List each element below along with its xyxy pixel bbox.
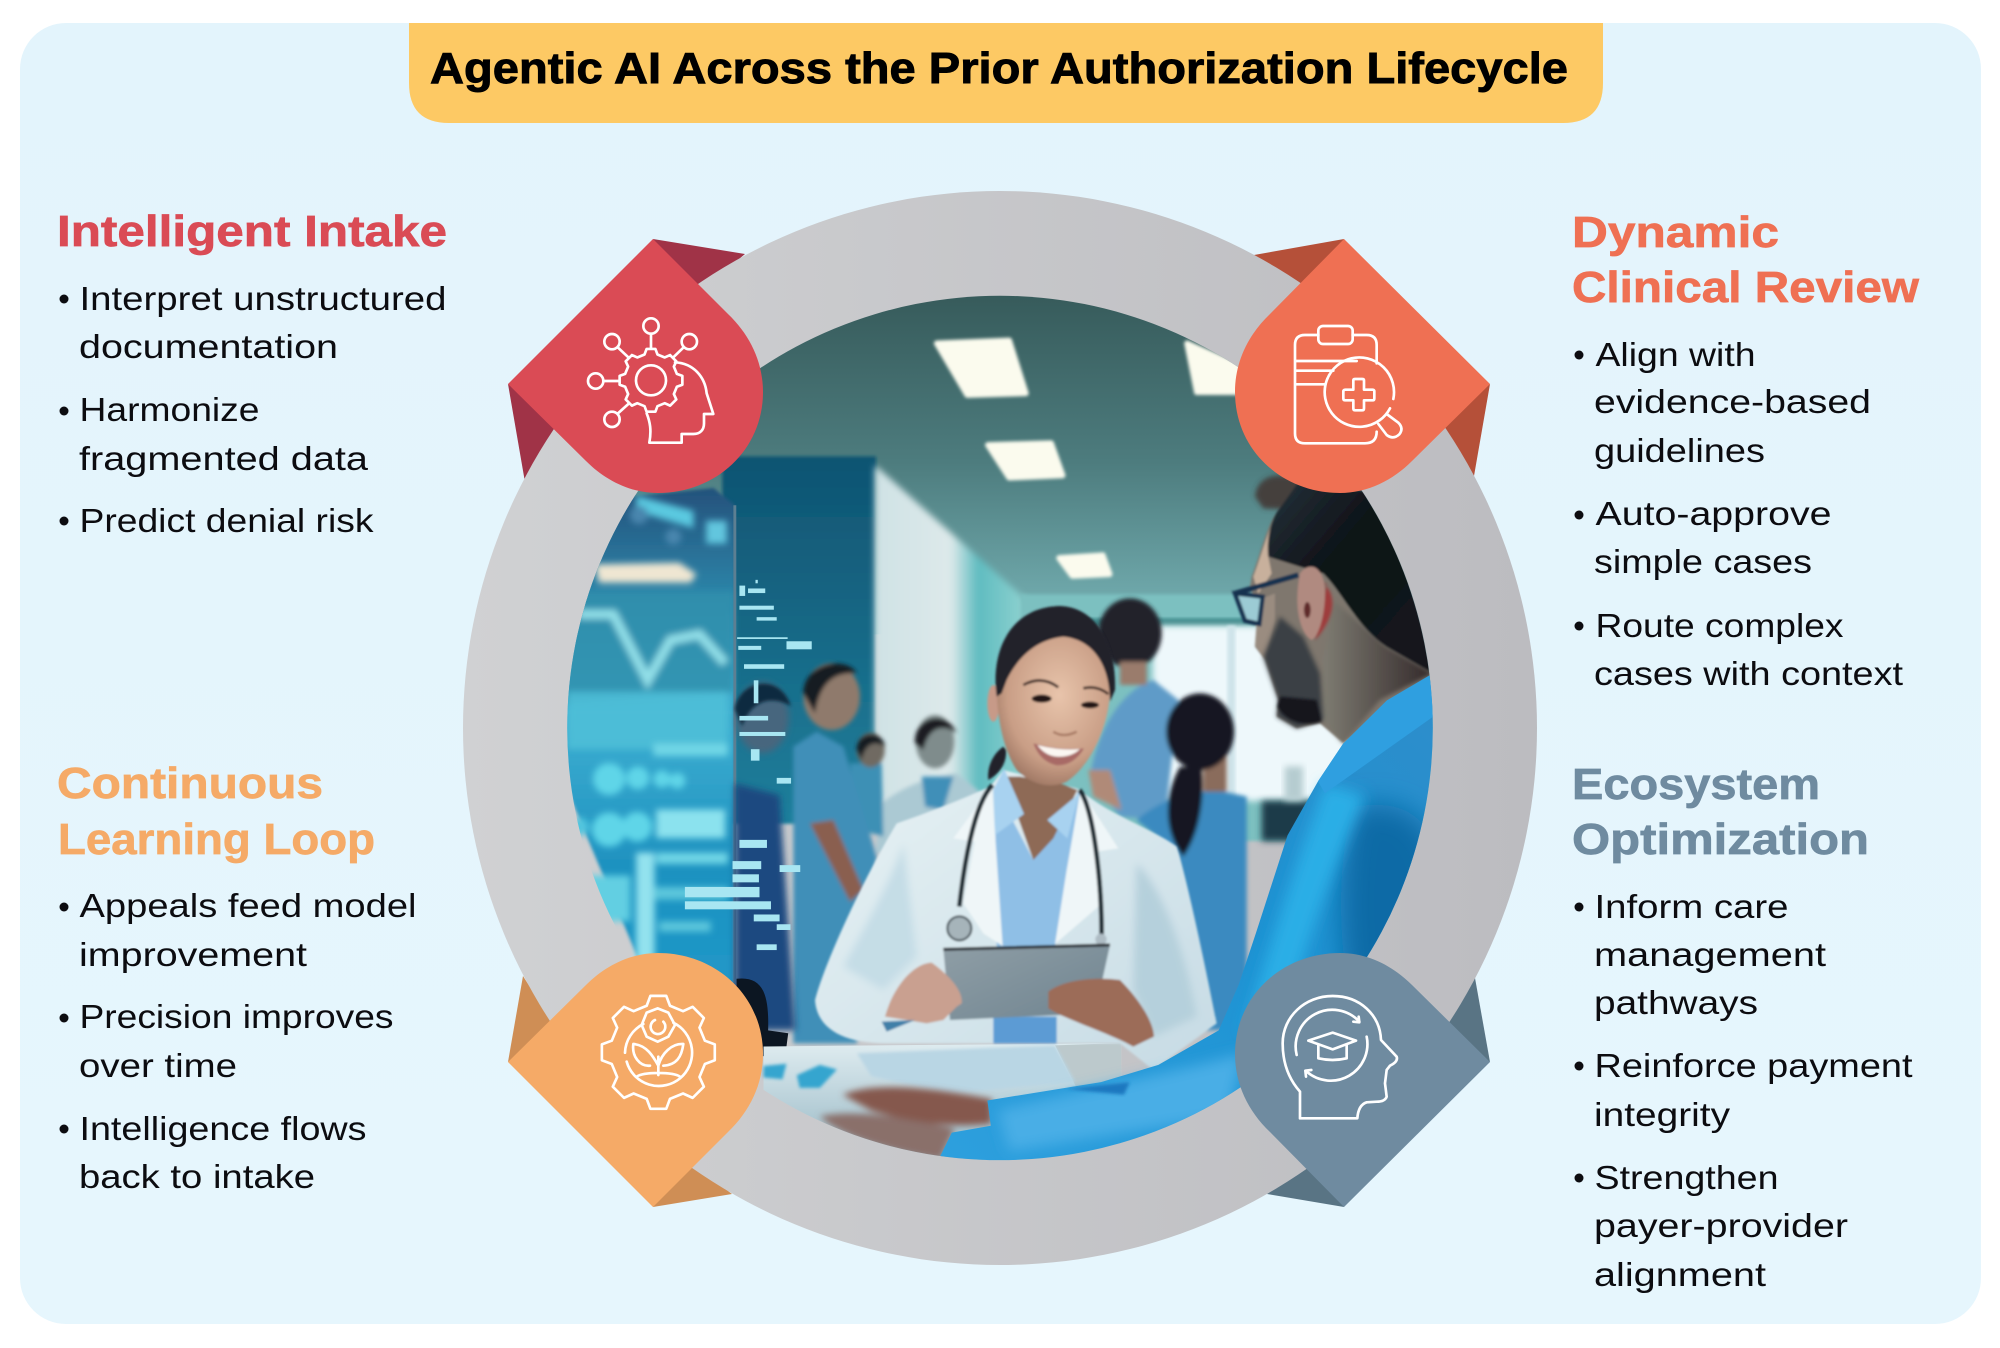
heading: dynamic clinical review — [1572, 208, 1920, 312]
heading: continuous learning loop: Learning Loop — [58, 815, 375, 864]
heading: ecosystem optimization — [1572, 760, 1869, 864]
central photo: clinicians in hospital — [567, 296, 1433, 1160]
bullet list: continuous learning loop: over time — [79, 1047, 237, 1084]
man's head — [1235, 475, 1433, 743]
grey cycle ring — [463, 191, 1537, 1265]
teardrop badge: dynamic clinical review — [1235, 239, 1490, 493]
fold flaps behind ring — [508, 239, 1490, 1207]
doctor in white coat — [815, 606, 1217, 1070]
bullet list: continuous learning loop — [60, 887, 416, 1195]
title text: Agentic AI Across the Prior Authorization Lifecycle — [430, 44, 1568, 93]
icon: head with graduation cap — [1283, 996, 1397, 1118]
bullet list: ecosystem optimization: Reinforce payment — [1594, 1047, 1912, 1084]
heading: ecosystem optimization: Ecosystem — [1572, 760, 1820, 809]
heading: dynamic clinical review: Dynamic — [1572, 208, 1779, 257]
hands on table — [820, 1087, 992, 1160]
foreground man in blue shirt — [936, 475, 1451, 1165]
heading: dynamic clinical review: Clinical Review — [1572, 263, 1920, 312]
bullet list: ecosystem optimization: payer-provider — [1594, 1207, 1848, 1244]
heading: continuous learning loop: Continuous — [57, 759, 323, 808]
background staff — [793, 598, 1247, 1043]
hologram figure and data dashes — [685, 580, 812, 1056]
bullet list: ecosystem optimization: Inform care — [1594, 888, 1788, 925]
bullet list: intelligent intake: Predict denial risk — [80, 502, 374, 539]
bullet list: dynamic clinical review: simple cases — [1594, 543, 1812, 580]
bullet list: dynamic clinical review: Auto-approve — [1596, 495, 1832, 532]
text block: dynamic clinical review — [1572, 208, 1920, 692]
bullet list: ecosystem optimization: Strengthen — [1594, 1159, 1778, 1196]
bullet list: dynamic clinical review: Align with — [1596, 336, 1756, 373]
bullet list: continuous learning loop: Intelligence flows — [80, 1110, 366, 1147]
text block: intelligent intake — [57, 207, 447, 539]
bullet list: intelligent intake: fragmented data — [79, 440, 369, 477]
bullet list: intelligent intake — [60, 280, 446, 539]
ceiling and room — [550, 290, 1468, 841]
bullet list: ecosystem optimization: pathways — [1594, 984, 1758, 1021]
heading: ecosystem optimization: Optimization — [1572, 815, 1869, 864]
text block: continuous learning loop — [57, 759, 416, 1195]
bullet list: ecosystem optimization: alignment — [1594, 1256, 1766, 1293]
heading: continuous learning loop — [57, 759, 375, 864]
title banner — [409, 23, 1603, 123]
bullet list: dynamic clinical review: evidence-based — [1594, 383, 1871, 420]
teardrop badge: ecosystem optimization — [1235, 953, 1490, 1207]
left data screen — [550, 488, 735, 987]
bullet list: dynamic clinical review — [1574, 336, 1903, 692]
teardrop badge: intelligent intake — [508, 239, 763, 493]
bullet list: continuous learning loop: Precision improves — [80, 998, 394, 1035]
bullet list: continuous learning loop: improvement — [79, 936, 307, 973]
icon: gear and head network — [588, 318, 713, 443]
table with papers — [764, 1043, 1121, 1168]
bullet list: ecosystem optimization — [1574, 888, 1912, 1293]
bullet list: continuous learning loop: back to intake — [79, 1158, 315, 1195]
bullet list: continuous learning loop: Appeals feed model — [80, 887, 416, 924]
icon: gear with growing plant — [602, 996, 715, 1109]
bullet list: intelligent intake: documentation — [79, 328, 338, 365]
bullet list: intelligent intake: Interpret unstructured — [80, 280, 446, 317]
teardrop badge: continuous learning loop — [508, 953, 763, 1207]
bullet list: intelligent intake: Harmonize — [80, 391, 260, 428]
heading: intelligent intake: Intelligent Intake — [57, 207, 447, 256]
bullet list: ecosystem optimization: integrity — [1594, 1096, 1731, 1133]
icon: clipboard and magnifier — [1295, 326, 1401, 443]
bullet list: dynamic clinical review: cases with context — [1594, 655, 1903, 692]
bullet list: dynamic clinical review: guidelines — [1594, 432, 1765, 469]
text block: ecosystem optimization — [1572, 760, 1912, 1293]
bullet list: ecosystem optimization: management — [1594, 936, 1826, 973]
bullet list: dynamic clinical review: Route complex — [1596, 607, 1844, 644]
ceiling lights — [937, 341, 1242, 576]
